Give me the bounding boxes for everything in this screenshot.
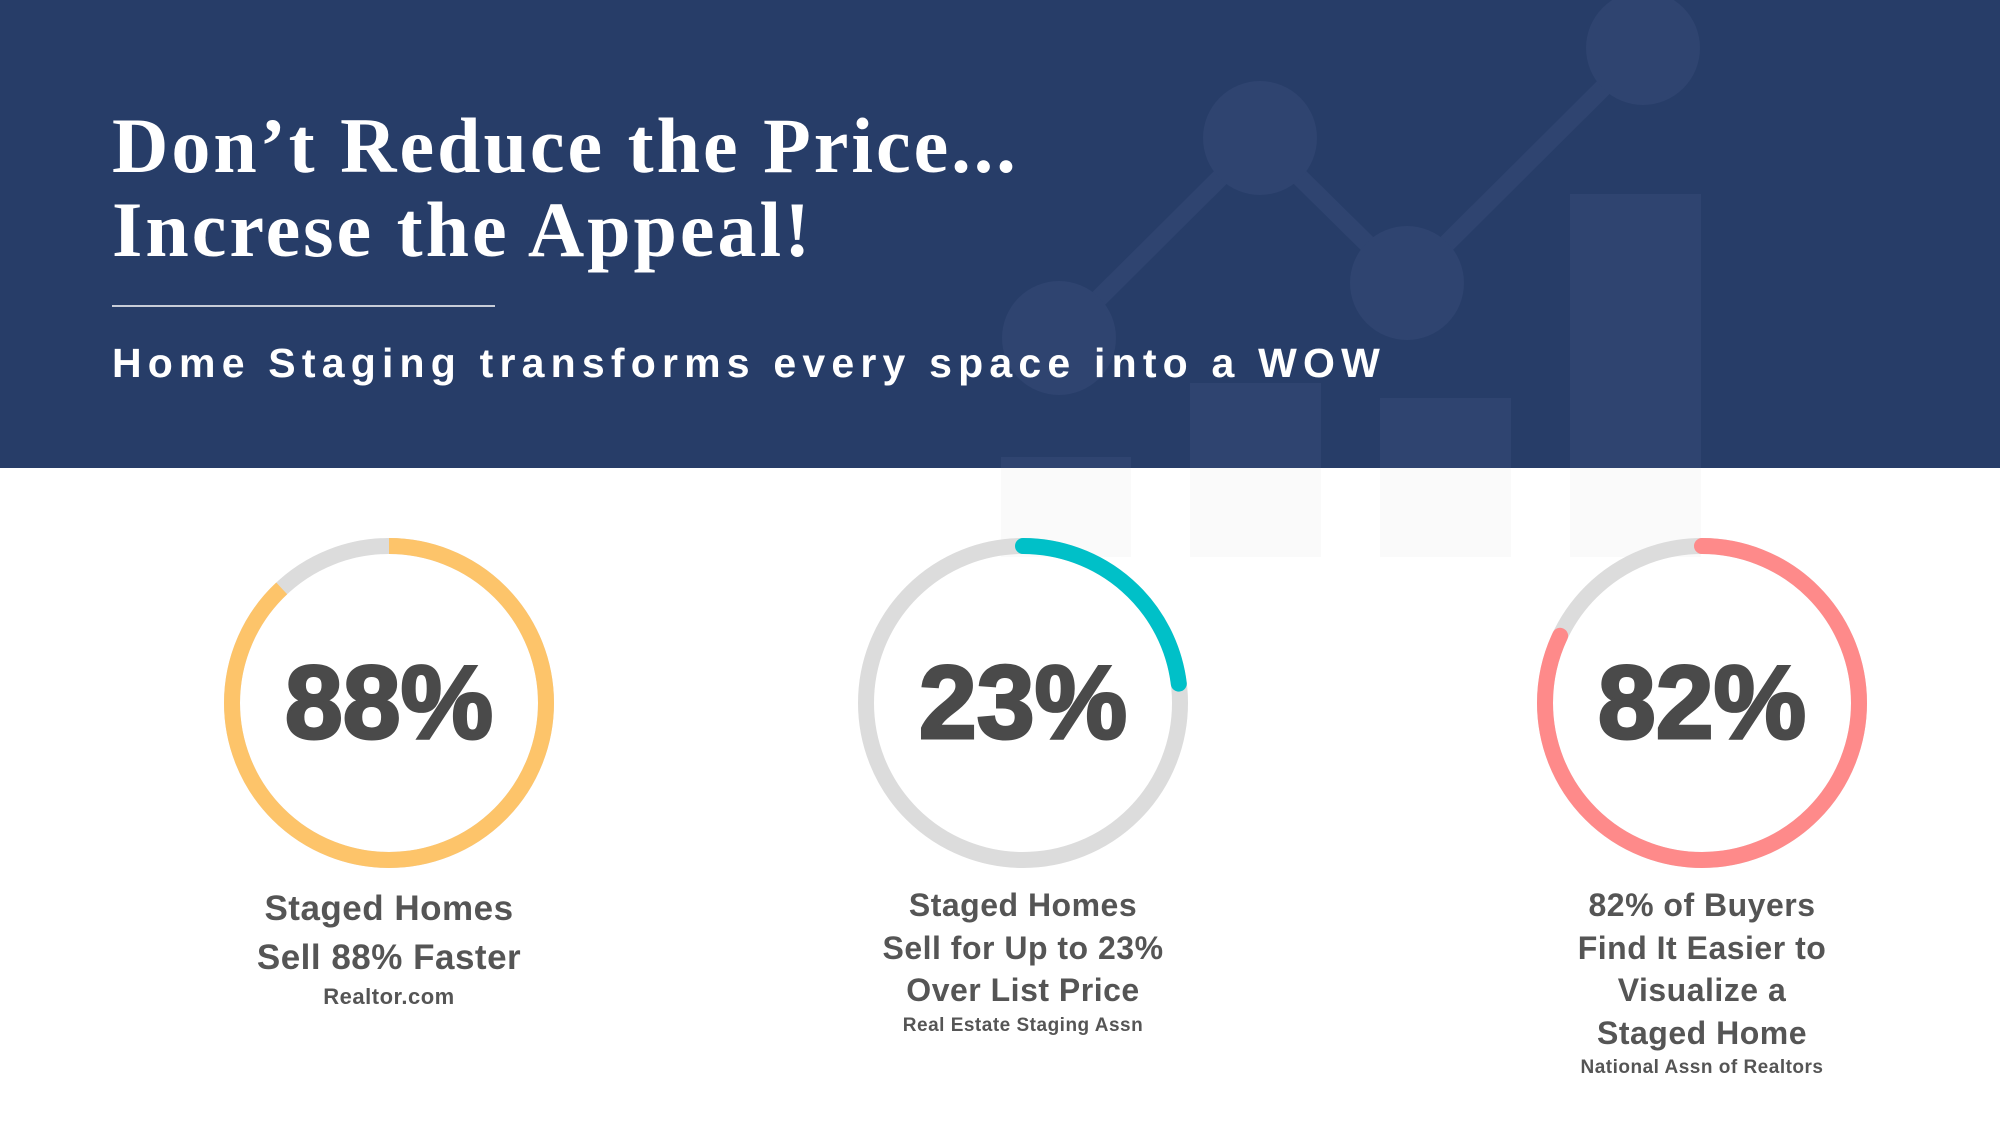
label 3: Visualize a <box>1618 972 1786 1008</box>
label 1 <box>257 889 521 1009</box>
header band <box>0 0 2000 468</box>
label 2: Sell for Up to 23% <box>882 930 1164 966</box>
background chart decoration <box>0 0 2000 600</box>
label 1: Staged Homes <box>264 889 514 928</box>
title <box>112 102 1019 273</box>
label 2: Over List Price <box>906 972 1140 1008</box>
donut charts <box>224 538 1867 868</box>
label 3: National Assn of Realtors <box>1580 1057 1824 1078</box>
donut charts: 82% <box>1598 645 1806 761</box>
subtitle: Home Staging transforms every space into a WOW <box>112 340 1386 386</box>
label 3: Staged Home <box>1597 1014 1807 1050</box>
label 1: Realtor.com <box>323 984 455 1009</box>
title: Don’t Reduce the Price... <box>112 102 1019 189</box>
label 2: Real Estate Staging Assn <box>903 1014 1143 1036</box>
donut charts: 23% <box>919 645 1127 761</box>
donut charts: 88% <box>285 645 493 761</box>
label 2: Staged Homes <box>909 887 1137 923</box>
label 1: Sell 88% Faster <box>257 938 521 977</box>
label 2 <box>882 887 1164 1036</box>
label 3: 82% of Buyers <box>1588 887 1816 923</box>
label 3 <box>1578 887 1826 1078</box>
title: Increse the Appeal! <box>112 186 813 273</box>
label 3: Find It Easier to <box>1578 930 1826 966</box>
